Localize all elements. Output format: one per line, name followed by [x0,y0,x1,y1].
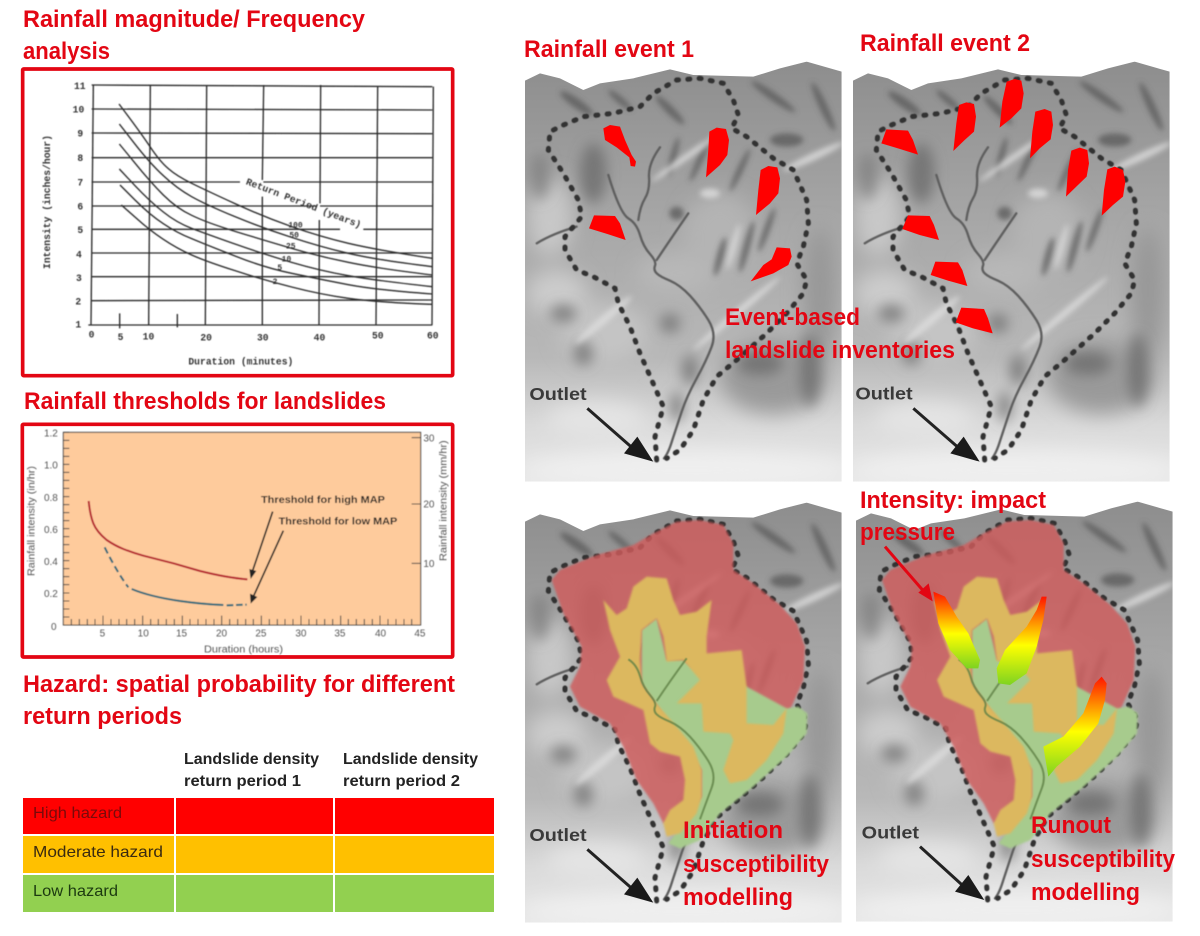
axis labels: 7 [77,178,83,189]
chart axis labels: 15 [176,629,188,640]
outlet label and arrow: Outlet [529,384,587,404]
axis labels: 40 [314,333,325,344]
title: rainfall magnitude frequency analysis: Rainfall magnitude/ Frequency [23,6,366,33]
susceptibility zones [882,520,1138,848]
label: event-based landslide inventories: landslide inventories [725,337,955,364]
column headers [184,751,478,790]
axis labels: 0 [89,330,95,341]
axis labels: 4 [76,249,82,260]
chart axis labels: Threshold for high MAP [261,495,385,506]
panel: rainfall threshold chart [22,424,453,657]
column headers: Landslide density [184,751,319,768]
label: runout susceptibility modelling [1031,812,1176,906]
chart axis labels: 0.2 [44,589,58,600]
column headers: Landslide density [343,751,478,768]
label: initiation susceptibility modelling: Initiation [683,817,783,844]
chart axis labels: 40 [375,629,387,640]
chart axis labels: 35 [334,629,346,640]
axis labels: 30 [257,332,269,343]
axis labels: 1 [75,319,81,330]
map: runout susceptibility [851,500,1184,930]
label: initiation susceptibility modelling [683,817,830,911]
label: intensity impact pressure: pressure [860,519,955,546]
chart axis labels: 45 [414,629,426,640]
chart axis labels: 10 [423,559,435,570]
axis labels: 100 [288,222,303,231]
chart axis labels: 0 [51,622,57,633]
landslides event 1 [589,125,792,281]
chart axis labels: 30 [423,433,435,444]
title: rainfall magnitude frequency analysis: analysis [23,38,110,65]
title: rainfall magnitude frequency analysis [23,6,366,65]
chart axis labels: 0.8 [44,493,58,504]
return period curves [119,104,432,304]
panel: intensity duration frequency chart [23,69,453,376]
axis labels: 5 [277,264,282,273]
outlet label and arrow [529,384,653,462]
title: hazard spatial probability: return periods [23,703,182,730]
intensity flames [933,592,1107,777]
axis labels: Duration (minutes) [188,356,293,367]
title: hazard spatial probability [23,671,455,730]
axis labels: Intensity (inches/hour) [42,135,53,269]
arrows to thresholds [249,512,283,604]
chart axis labels: 5 [100,629,106,640]
chart axis labels: 10 [138,629,149,640]
chart axis labels: 0.6 [44,525,58,536]
heading: rainfall event 1: Rainfall event 1 [524,36,694,63]
axis labels: 9 [77,129,83,140]
row: low hazard: Low hazard [33,883,118,900]
outlet label and arrow [862,823,984,900]
column headers: return period 1 [184,773,301,790]
panel: hazard table [23,751,494,912]
chart axis labels: 1.0 [44,460,58,471]
landslides event 2 [881,79,1125,333]
axis labels: 5 [118,332,124,343]
label: runout susceptibility modelling: modelling [1031,879,1140,906]
label: event-based landslide inventories: Event-based [725,304,860,331]
threshold curve: high MAP [89,501,247,579]
label: runout susceptibility modelling: Runout [1031,812,1111,839]
axis labels: 11 [74,81,86,92]
chart axis labels: Rainfall intensity (mm/hr) [439,440,450,561]
axis labels: 10 [143,331,154,342]
outlet label and arrow [855,383,980,462]
chart axis labels: 20 [423,500,435,511]
axis labels: Return Period (years) [244,177,363,231]
title: hazard spatial probability: Hazard: spatial probability for different [23,671,455,698]
axis labels: 2 [75,296,81,307]
axis labels: 6 [77,201,83,212]
threshold curve: low MAP [105,547,247,605]
chart axis labels: 20 [216,629,228,640]
heading: rainfall event 2: Rainfall event 2 [860,30,1030,57]
axis labels: 25 [286,242,296,251]
axis labels: 50 [289,232,299,241]
map: initiation susceptibility [520,501,853,931]
title: rainfall thresholds: Rainfall thresholds for landslides [24,388,386,415]
row: high hazard: High hazard [33,805,122,822]
outlet label and arrow: Outlet [862,823,919,843]
map: rainfall event 1 [520,60,853,490]
axis labels: 10 [282,255,291,264]
axis labels: 8 [77,153,83,164]
row: low hazard [23,875,494,912]
axis labels: 3 [76,273,82,284]
arrow: impact pressure [885,547,933,601]
row: high hazard [23,798,494,834]
chart axis labels: Threshold for low MAP [279,517,398,528]
map: rainfall event 2 [848,60,1181,490]
chart axis labels [26,428,450,655]
chart axis labels: 25 [255,629,267,640]
outlet label and arrow [529,825,653,903]
label: intensity impact pressure: Intensity: impact [860,487,1046,514]
susceptibility zones [552,520,807,848]
axis labels: 20 [200,333,212,344]
row: moderate hazard [23,836,494,873]
label: initiation susceptibility modelling: modelling [683,884,793,911]
axis labels [42,81,439,367]
outlet label and arrow: Outlet [529,825,587,845]
axis labels: 2 [273,278,278,287]
axis labels: 50 [372,331,384,342]
outlet label and arrow: Outlet [855,383,913,403]
chart axis labels: 1.2 [44,428,58,439]
chart axis labels: 0.4 [44,557,58,568]
axis labels: 5 [77,225,83,236]
column headers: return period 2 [343,773,460,790]
row: moderate hazard: Moderate hazard [33,844,163,861]
axis labels: 10 [73,105,84,116]
label: event-based landslide inventories [725,304,955,364]
label: runout susceptibility modelling: susceptibility [1031,846,1176,873]
label: initiation susceptibility modelling: susceptibility [683,851,830,878]
label: intensity impact pressure [860,487,1046,546]
chart axis labels: 30 [295,629,307,640]
chart axis labels: Duration (hours) [204,644,283,655]
chart axis labels: Rainfall intensity (in/hr) [26,466,37,576]
axis labels: 60 [427,331,439,342]
